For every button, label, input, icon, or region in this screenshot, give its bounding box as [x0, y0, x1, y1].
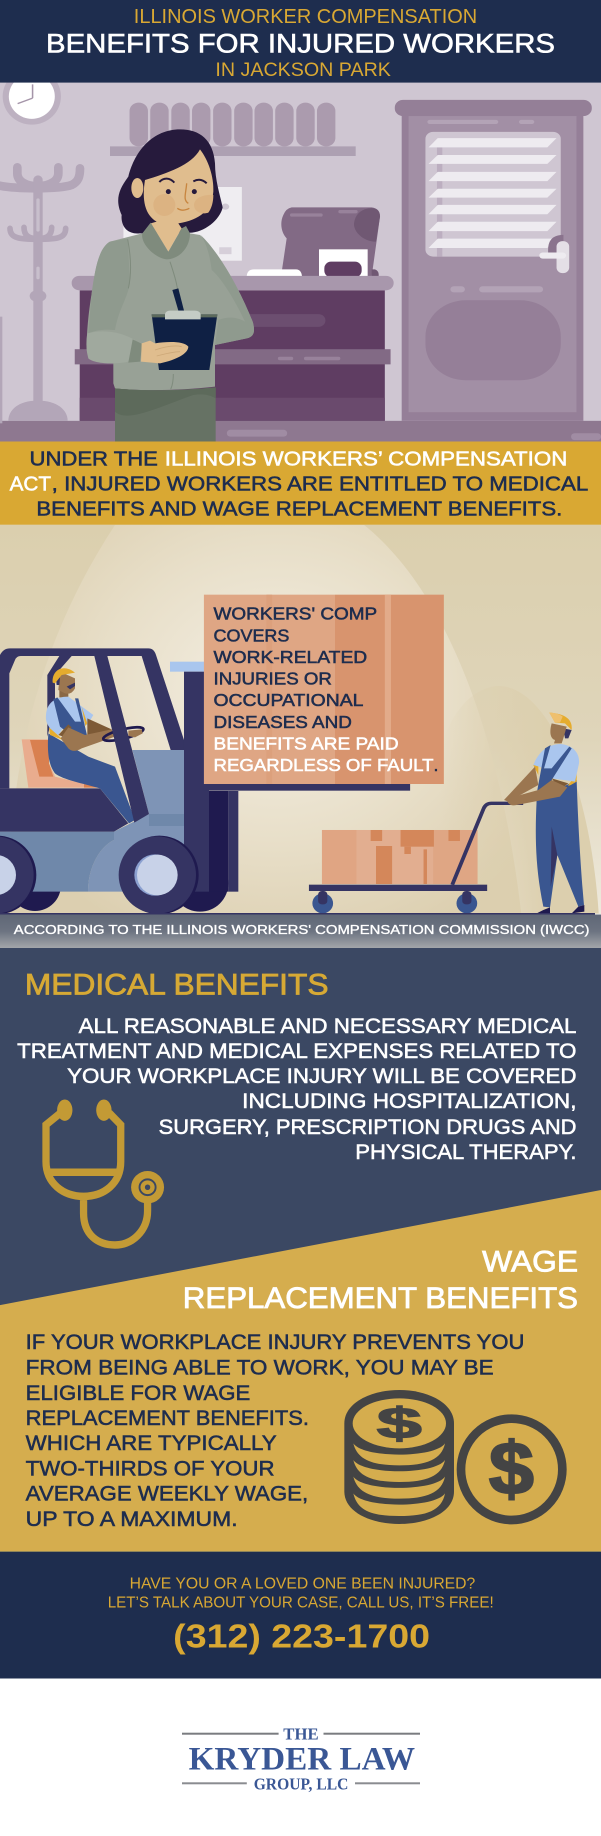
cargo box on forks	[204, 595, 444, 791]
medical text	[17, 1015, 576, 1164]
floor	[0, 421, 601, 442]
header banner	[0, 0, 601, 83]
logo: The Kryder Law Group, LLC	[182, 1724, 420, 1793]
box caption: DISEASES AND	[214, 712, 352, 732]
medical text: SURGERY, PRESCRIPTION DRUGS AND	[159, 1116, 576, 1139]
call to action text: LET’S TALK ABOUT YOUR CASE, CALL US, IT’S FREE!	[108, 1594, 494, 1611]
coat rack	[0, 167, 80, 423]
source bar: ACCORDING TO THE ILLINOIS WORKERS' COMPENSATION COMMISSION (IWCC)	[14, 922, 590, 937]
cart with boxes	[309, 803, 523, 913]
box caption: WORK-RELATED	[214, 647, 367, 667]
medical heading: MEDICAL BENEFITS	[25, 969, 329, 1002]
wage text: FROM BEING ABLE TO WORK, YOU MAY BE	[26, 1356, 494, 1379]
woman with clipboard	[86, 129, 254, 442]
medical text: INCLUDING HOSPITALIZATION,	[242, 1090, 576, 1113]
gold intro band	[0, 442, 601, 525]
wage text: REPLACEMENT BENEFITS.	[26, 1407, 309, 1430]
box caption: INJURIES OR	[214, 669, 332, 689]
medical text: ALL REASONABLE AND NECESSARY MEDICAL	[79, 1015, 576, 1038]
door	[395, 100, 592, 421]
wage text	[26, 1331, 524, 1531]
illustration: warehouse forklift scene	[0, 525, 601, 915]
wage heading: WAGE	[482, 1246, 578, 1278]
wage heading	[183, 1246, 578, 1315]
forklift pillar	[94, 656, 149, 823]
wage text: WHICH ARE TYPICALLY	[26, 1432, 277, 1455]
forklift	[0, 648, 238, 914]
header line 1: ILLINOIS WORKER COMPENSATION	[134, 5, 477, 28]
call to action text: HAVE YOU OR A LOVED ONE BEEN INJURED?	[130, 1575, 475, 1592]
medical text: PHYSICAL THERAPY.	[355, 1141, 576, 1164]
box caption: COVERS	[214, 626, 289, 646]
wage text: ELIGIBLE FOR WAGE	[26, 1382, 250, 1405]
illustration: office reception	[0, 68, 601, 442]
gold intro band: , INJURED WORKERS ARE ENTITLED TO MEDICAL	[52, 473, 588, 495]
gold intro band: ILLINOIS WORKERS’ COMPENSATION	[165, 449, 567, 471]
panel: wage replacement benefits	[0, 1190, 601, 1552]
source bar	[0, 914, 601, 948]
call to action text	[108, 1575, 494, 1611]
header line 3: IN JACKSON PARK	[215, 60, 391, 81]
box caption: .	[434, 755, 438, 775]
box caption: BENEFITS ARE PAID	[214, 734, 399, 754]
phone number: (312) 223-1700	[173, 1617, 430, 1654]
box caption: REGARDLESS OF FAULT	[214, 755, 434, 775]
box caption: OCCUPATIONAL	[214, 690, 364, 710]
box caption	[214, 604, 438, 775]
icon: coins: $	[489, 1427, 534, 1510]
ground line	[0, 913, 595, 915]
reception desk	[72, 276, 394, 421]
wage text: AVERAGE WEEKLY WAGE,	[26, 1482, 308, 1505]
medical text: TREATMENT AND MEDICAL EXPENSES RELATED TO	[17, 1040, 576, 1063]
gold intro band: UNDER THE	[30, 449, 158, 471]
logo: The Kryder Law Group, LLC: THE	[283, 1724, 319, 1743]
gold intro band: ACT	[10, 473, 51, 495]
wage text: IF YOUR WORKPLACE INJURY PREVENTS YOU	[26, 1331, 524, 1354]
poster on wall	[123, 187, 242, 261]
warehouse worker	[504, 713, 584, 913]
cash register	[247, 207, 380, 277]
gold intro band: BENEFITS AND WAGE REPLACEMENT BENEFITS.	[36, 498, 562, 520]
wage heading: REPLACEMENT BENEFITS	[183, 1282, 578, 1315]
icon: coins: $	[377, 1400, 422, 1448]
medical text: YOUR WORKPLACE INJURY WILL BE COVERED	[67, 1065, 576, 1088]
icon: stethoscope	[46, 1099, 164, 1245]
panel: call to action	[0, 1551, 601, 1678]
shelf with binders	[110, 103, 356, 156]
wage text: UP TO A MAXIMUM.	[26, 1508, 238, 1531]
icon: wall clock	[3, 68, 61, 125]
panel: medical benefits	[0, 948, 601, 1398]
title: BENEFITS FOR INJURED WORKERS	[46, 28, 555, 58]
logo: The Kryder Law Group, LLC: GROUP, LLC	[254, 1774, 348, 1793]
icon: coins	[344, 1390, 562, 1524]
wage text: TWO-THIRDS OF YOUR	[26, 1458, 275, 1480]
forklift driver	[22, 668, 145, 823]
box caption: WORKERS' COMP	[214, 604, 377, 624]
logo: The Kryder Law Group, LLC: KRYDER LAW	[189, 1741, 415, 1777]
